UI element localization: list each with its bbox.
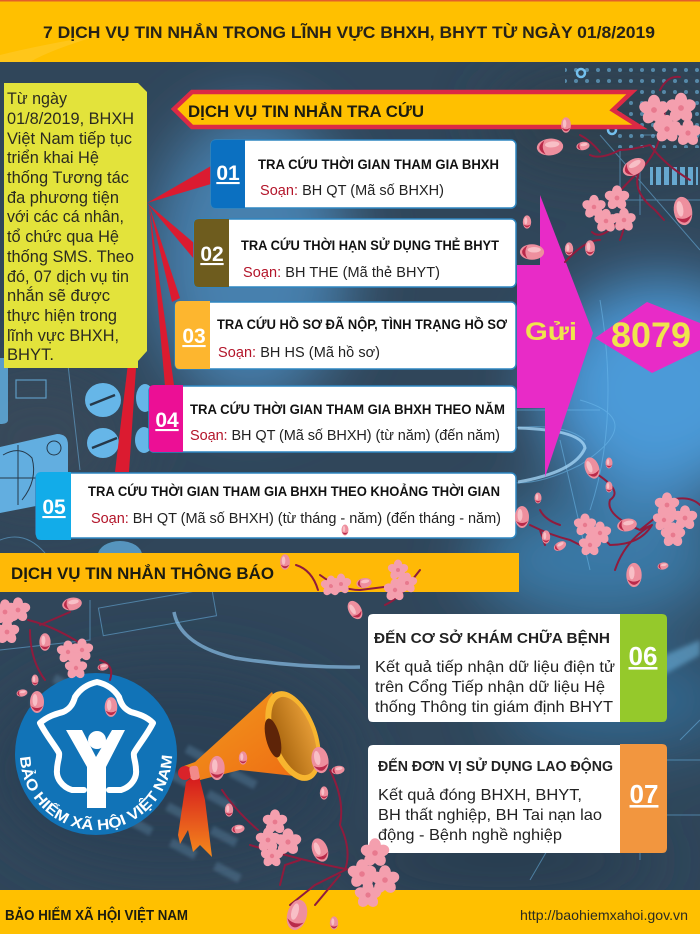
card 05: Soạn: BH QT (Mã số BHXH) (từ tháng - năm) (đến tháng - năm) (91, 511, 501, 527)
intro text box: thực hiện trong (7, 307, 117, 325)
card 06: thống Thông tin giám định BHYT (375, 699, 613, 716)
card 07 (368, 744, 667, 853)
card 02: TRA CỨU THỜI HẠN SỬ DỤNG THẺ BHYT (241, 238, 500, 253)
send arrow (517, 195, 593, 477)
card 06: 06 (629, 641, 657, 671)
intro text box: tổ chức qua Hệ (7, 228, 119, 246)
card 07: BH thất nghiệp, BH Tai nạn lao (378, 807, 602, 824)
intro text box: nhắn sẽ được (7, 286, 110, 305)
title bar (0, 0, 700, 62)
banner: dịch vụ tin nhắn thông báo (0, 553, 519, 592)
banner: dịch vụ tin nhắn tra cứu (174, 92, 640, 127)
send label: Gửi (525, 318, 577, 346)
panel details (0, 358, 154, 569)
card 01: Soạn: BH QT (Mã số BHXH) (260, 183, 444, 199)
card 04: 04 (155, 409, 179, 432)
card 01 (211, 140, 516, 208)
card 06: trên Cổng Tiếp nhận dữ liệu Hệ (375, 678, 605, 696)
hexagon: 8079 (595, 302, 700, 373)
card 04 (149, 385, 516, 452)
intro text box: với các cá nhân, (7, 208, 124, 226)
card 03 (175, 301, 516, 369)
intro text box: thống Tương tác (7, 169, 129, 187)
blossoms: top right (520, 77, 700, 262)
card 05 (36, 472, 516, 540)
intro text box: triển khai Hệ (7, 149, 99, 167)
intro text box: lĩnh vực BHXH, (7, 327, 119, 345)
card 03: Soạn: BH HS (Mã hồ sơ) (218, 345, 380, 361)
intro text box: đó, 07 dịch vụ tin (7, 268, 129, 286)
hexagon: 8079: 8079 (611, 316, 691, 355)
footer bar (0, 890, 700, 934)
intro text box: thống SMS. Theo (7, 248, 134, 266)
card 01: 01 (216, 162, 240, 185)
intro text box: 01/8/2019, BHXH (7, 110, 134, 128)
card 06 (368, 614, 667, 722)
card 06: Kết quả tiếp nhận dữ liệu điện tử (375, 659, 615, 676)
card 04: Soạn: BH QT (Mã số BHXH) (từ năm) (đến năm) (190, 428, 500, 444)
card 07: động - Bệnh nghề nghiệp (378, 827, 562, 844)
intro text box (4, 83, 147, 368)
card 04: TRA CỨU THỜI GIAN THAM GIA BHXH THEO NĂM (190, 402, 505, 417)
icon: megaphone (178, 684, 332, 857)
intro text box: Việt Nam tiếp tục (7, 130, 132, 148)
logo: Bảo hiểm xã hội Việt Nam (15, 673, 177, 835)
card 02: Soạn: BH THE (Mã thẻ BHYT) (243, 265, 440, 281)
intro text box: đa phương tiện (7, 189, 119, 207)
card 05: TRA CỨU THỜI GIAN THAM GIA BHXH THEO KHOẢNG THỜI GIAN (88, 484, 500, 499)
blossoms: right middle (515, 455, 700, 587)
banner: dịch vụ tin nhắn thông báo: DỊCH VỤ TIN NHẮN THÔNG BÁO (11, 564, 274, 583)
card 05: 05 (42, 496, 66, 519)
intro text box: Từ ngày (7, 90, 68, 108)
card 07: 07 (630, 779, 658, 809)
card 01: TRA CỨU THỜI GIAN THAM GIA BHXH (258, 157, 499, 172)
connector lines (115, 166, 211, 472)
blossoms: notification banner (280, 524, 420, 622)
card 03: 03 (182, 325, 206, 348)
intro text box: BHYT. (7, 346, 54, 364)
card 07: ĐẾN ĐƠN VỊ SỬ DỤNG LAO ĐỘNG (378, 757, 613, 775)
card 07: Kết quả đóng BHXH, BHYT, (378, 787, 582, 804)
card 02: 02 (200, 243, 224, 266)
card 06: ĐẾN CƠ SỞ KHÁM CHỮA BỆNH (374, 629, 610, 647)
footer bar: BẢO HIỂM XÃ HỘI VIỆT NAM (5, 906, 188, 924)
card 02 (194, 219, 516, 287)
keyboard (1, 670, 284, 883)
blossoms: bottom centre (209, 746, 401, 932)
top-right circuit (565, 64, 700, 90)
banner: dịch vụ tin nhắn tra cứu: DỊCH VỤ TIN NHẮN TRA CỨU (188, 102, 424, 121)
title: 7 DỊCH VỤ TIN NHẮN TRONG LĨNH VỰC BHXH, BHYT TỪ NGÀY 01/8/2019 (43, 22, 655, 42)
footer bar: http://baohiemxahoi.gov.vn (520, 907, 688, 923)
card 03: TRA CỨU HỒ SƠ ĐÃ NỘP, TÌNH TRẠNG HỒ SƠ (217, 317, 507, 332)
blossoms: left of logo (0, 596, 117, 717)
logo: Bảo hiểm xã hội Việt Nam: BẢO HIỂM XÃ HỘI VIỆT NAM (20, 755, 172, 830)
